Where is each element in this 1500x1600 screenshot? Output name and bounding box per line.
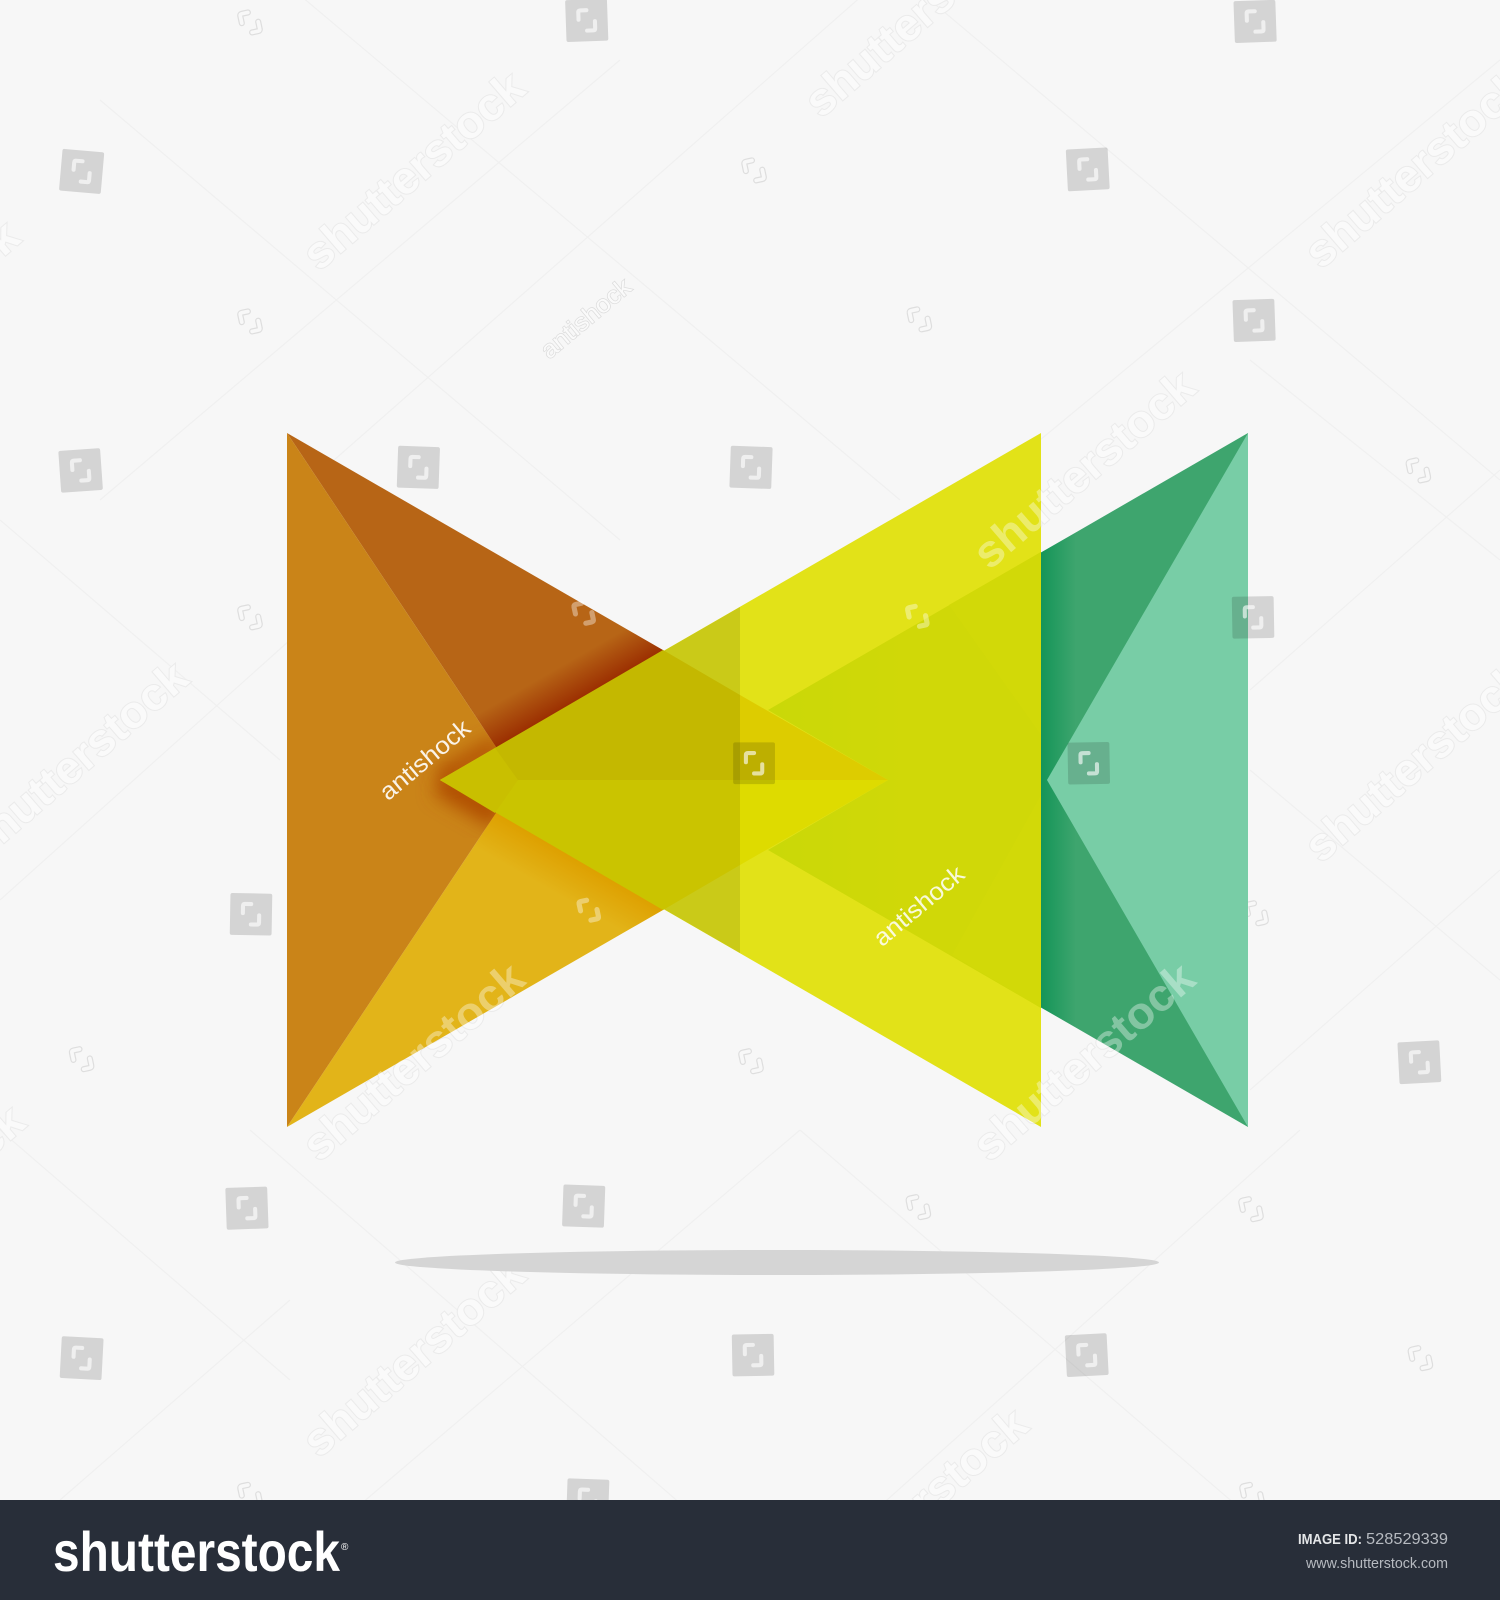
- darker left band: [440, 607, 740, 953]
- watermarks: background layer: shutterstock: [963, 360, 1205, 579]
- watermarks: layer over shapes: shutterstock: [963, 952, 1205, 1170]
- yellow tip facet: [440, 748, 518, 813]
- shadow on left facet near tip: [440, 744, 500, 817]
- watermarks: background layer: shutterstock: [963, 952, 1205, 1170]
- overlap with orange, upper right: [740, 695, 888, 780]
- green light facet: [1047, 433, 1248, 1127]
- yellow triangle: [440, 433, 1041, 1127]
- orange triangle: [287, 433, 664, 1127]
- orange left facet: [287, 433, 518, 1127]
- watermarks: background layer: shutterstock: [292, 1248, 534, 1466]
- watermarks: layer over shapes: shutterstock: [963, 360, 1205, 579]
- watermarks: background layer: shutterstock: [292, 61, 534, 280]
- overlap with orange, lower left: [440, 780, 740, 910]
- antishock credit on yellow: antishock: [869, 860, 971, 952]
- shadow on top facet: [287, 433, 888, 780]
- green triangle: [1041, 433, 1248, 1127]
- floor shadow ellipse: [395, 1250, 1159, 1275]
- image id number: 528529339: [1366, 1531, 1448, 1548]
- watermarks: background layer: antishock: [536, 273, 637, 364]
- antishock credit on orange: antishock: [375, 714, 477, 806]
- green edge shadow: [1041, 534, 1072, 1024]
- watermarks: background layer: shutterstock: [292, 952, 534, 1170]
- footer background: [0, 1500, 1500, 1600]
- shutterstock logo: shutterstock: [53, 1520, 341, 1583]
- green dark facets: [647, 433, 1248, 1127]
- registered mark: ®: [341, 1542, 349, 1553]
- overlap with orange, lower right: [740, 780, 888, 865]
- image id: IMAGE ID:: [1298, 1531, 1362, 1548]
- upper tip shadow: [440, 744, 500, 778]
- watermarks: layer over shapes: shutterstock: [292, 952, 534, 1170]
- website url: www.shutterstock.com: [1305, 1556, 1448, 1572]
- lower tip shadow: [440, 782, 500, 817]
- upper fold in overlap: [949, 552, 1041, 735]
- footer bar: [0, 1500, 1500, 1600]
- orange bottom golden facet: [287, 780, 888, 1127]
- yellow and green overlap: [768, 552, 1041, 1008]
- icon: outlined watermark marks on shapes: [574, 602, 927, 922]
- watermarks: layer over shapes: [378, 489, 1198, 1123]
- yellow base: [440, 433, 1041, 1127]
- orange top dark facet: [287, 433, 888, 780]
- lower fold in overlap: [952, 795, 1041, 1008]
- shadow on bottom facet: [287, 780, 888, 1127]
- overlap with orange, upper left: [440, 650, 740, 780]
